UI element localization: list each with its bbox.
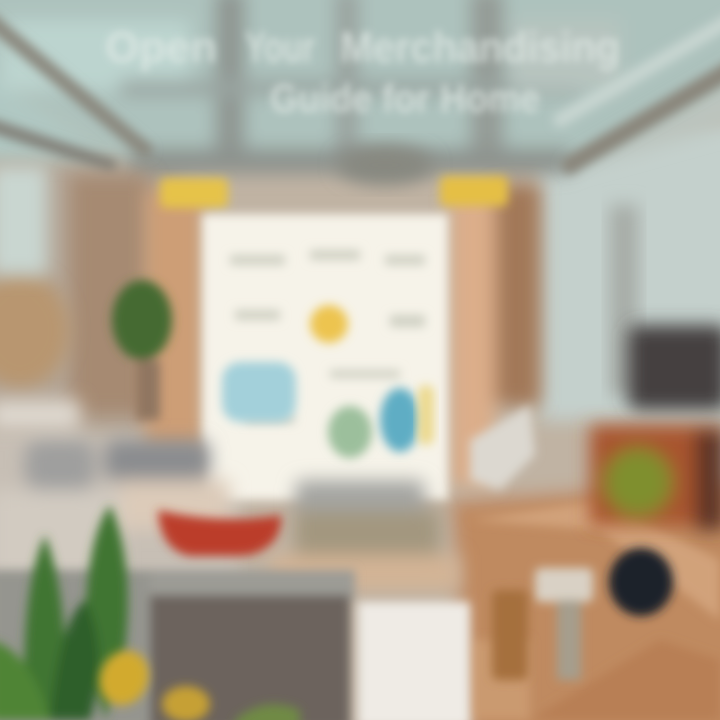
black vase [609, 548, 673, 616]
right curtain [450, 185, 540, 485]
poster green shape [328, 406, 372, 458]
left tan object [0, 272, 70, 388]
yellow flower right [162, 686, 210, 720]
wooden block [492, 590, 528, 680]
right side chair [470, 405, 535, 490]
ceiling beams [0, 20, 720, 165]
poster text rows [230, 250, 425, 423]
ceiling [0, 0, 720, 174]
title text: Your [245, 23, 315, 72]
grey sofa [0, 570, 355, 720]
right wall dark column [610, 205, 638, 395]
yellow flower left [90, 642, 158, 714]
title text: Guide for Home [270, 77, 540, 121]
central table [270, 480, 460, 590]
left wood panel [70, 175, 150, 415]
side table [535, 568, 593, 680]
hanging plant [112, 280, 172, 420]
title text: Merchandising [340, 23, 620, 72]
left furniture [0, 400, 230, 580]
poster yellow accent [418, 385, 434, 445]
central poster [202, 214, 448, 500]
red bowl [158, 510, 282, 556]
yellow light right [440, 176, 508, 206]
title text [105, 29, 620, 116]
left curtain [145, 190, 203, 450]
green plant [0, 505, 300, 720]
poster blue shape [222, 362, 296, 422]
poster teal shape [380, 388, 420, 452]
white cushion [358, 602, 470, 720]
colourful cabinet [590, 425, 720, 530]
yellow light left [160, 178, 228, 208]
floor planks [470, 500, 720, 720]
ceiling fixture [337, 145, 433, 185]
dark speaker [628, 325, 720, 410]
title text: Open [105, 23, 217, 72]
poster yellow circle [310, 305, 348, 343]
left light wall [0, 165, 48, 275]
